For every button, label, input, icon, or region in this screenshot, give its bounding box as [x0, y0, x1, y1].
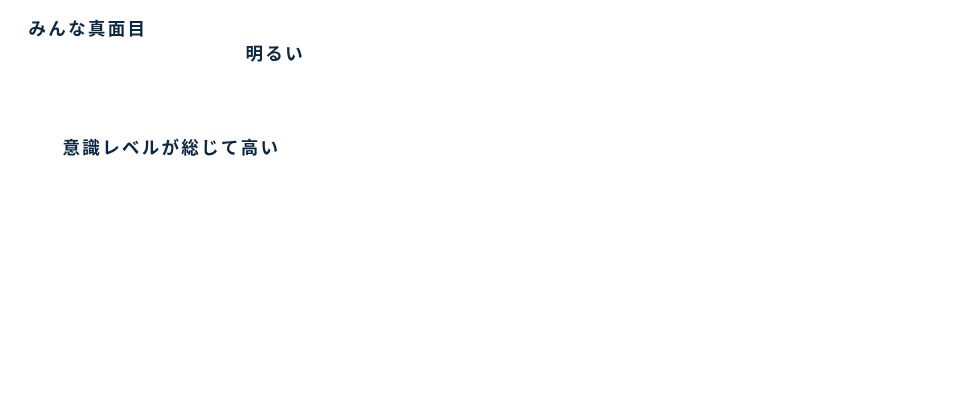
text label: cheerful: 明るい — [246, 44, 305, 64]
text label: everyone is serious: みんな真面目 — [28, 19, 147, 39]
text label: high awareness overall: 意識レベルが総じて高い — [62, 138, 280, 158]
